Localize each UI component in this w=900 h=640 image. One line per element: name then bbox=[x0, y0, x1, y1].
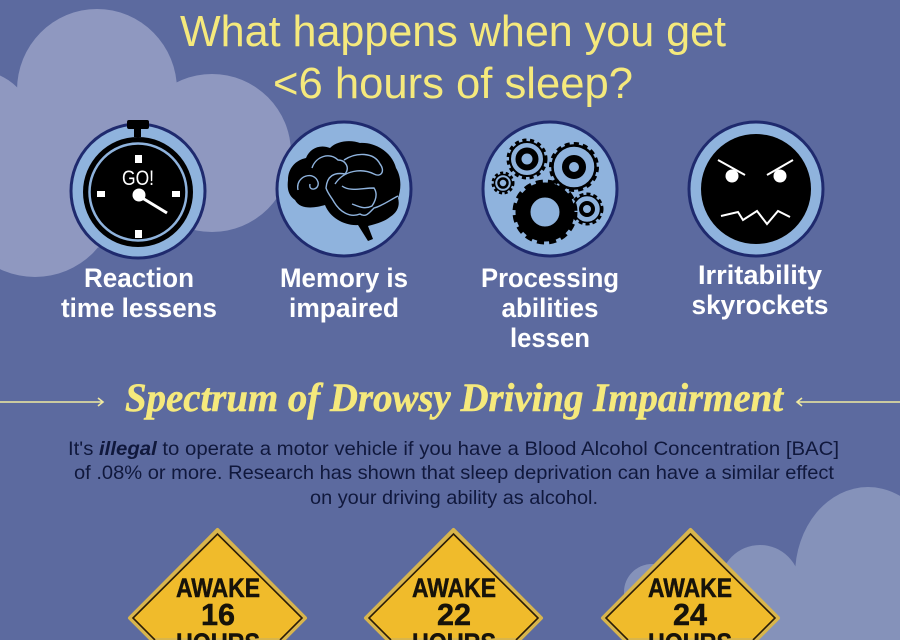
sign: awake 24 hours: AWAKE bbox=[648, 573, 732, 603]
icon: stopwatch bbox=[71, 120, 205, 258]
sign: awake 24 hours: 24 bbox=[673, 597, 708, 632]
intro paragraph: on your driving ability as alcohol. bbox=[310, 487, 598, 509]
sign: awake 22 hours: AWAKE bbox=[412, 573, 496, 603]
title: <6 hours of sleep? bbox=[273, 59, 633, 108]
label: memory: Memory is bbox=[280, 263, 408, 293]
label: reaction time: Reaction bbox=[84, 263, 194, 293]
label: processing: Processing bbox=[481, 263, 619, 293]
label: irritability: skyrockets bbox=[692, 290, 828, 320]
label: memory bbox=[280, 263, 408, 323]
sign: awake 16 hours: AWAKE bbox=[176, 573, 260, 603]
cloud: top left bbox=[0, 9, 291, 277]
label: irritability: Irritability bbox=[698, 260, 822, 290]
section heading: Spectrum of Drowsy Driving Impairment bbox=[125, 375, 785, 420]
label: reaction time bbox=[61, 263, 217, 323]
intro paragraph bbox=[68, 438, 839, 509]
label: processing bbox=[481, 263, 619, 353]
icon: brain bbox=[277, 122, 411, 256]
cloud: bottom right bbox=[624, 487, 900, 640]
intro paragraph: of .08% or more. Research has shown that sleep deprivation can have a similar effect bbox=[74, 462, 835, 484]
intro paragraph: It's illegal to operate a motor vehicle if you have a Blood Alcohol Concentration [BAC] bbox=[68, 438, 839, 460]
label: irritability bbox=[692, 260, 828, 320]
icon: gears bbox=[483, 122, 617, 256]
sign: awake 22 hours bbox=[366, 530, 541, 640]
sign: awake 24 hours bbox=[603, 530, 778, 640]
label: processing: abilities bbox=[502, 293, 598, 323]
sign: awake 16 hours bbox=[130, 530, 305, 640]
title bbox=[180, 7, 726, 108]
icon: stopwatch: GO! bbox=[122, 167, 154, 190]
right arrow bbox=[797, 398, 900, 406]
sign: awake 22 hours: 22 bbox=[437, 597, 471, 632]
icon: angry face bbox=[689, 122, 823, 256]
title: What happens when you get bbox=[180, 7, 726, 56]
label: reaction time: time lessens bbox=[61, 293, 217, 323]
label: memory: impaired bbox=[289, 293, 399, 323]
sign: awake 16 hours: 16 bbox=[201, 597, 235, 632]
left arrow bbox=[0, 398, 103, 406]
label: processing: lessen bbox=[510, 323, 590, 353]
